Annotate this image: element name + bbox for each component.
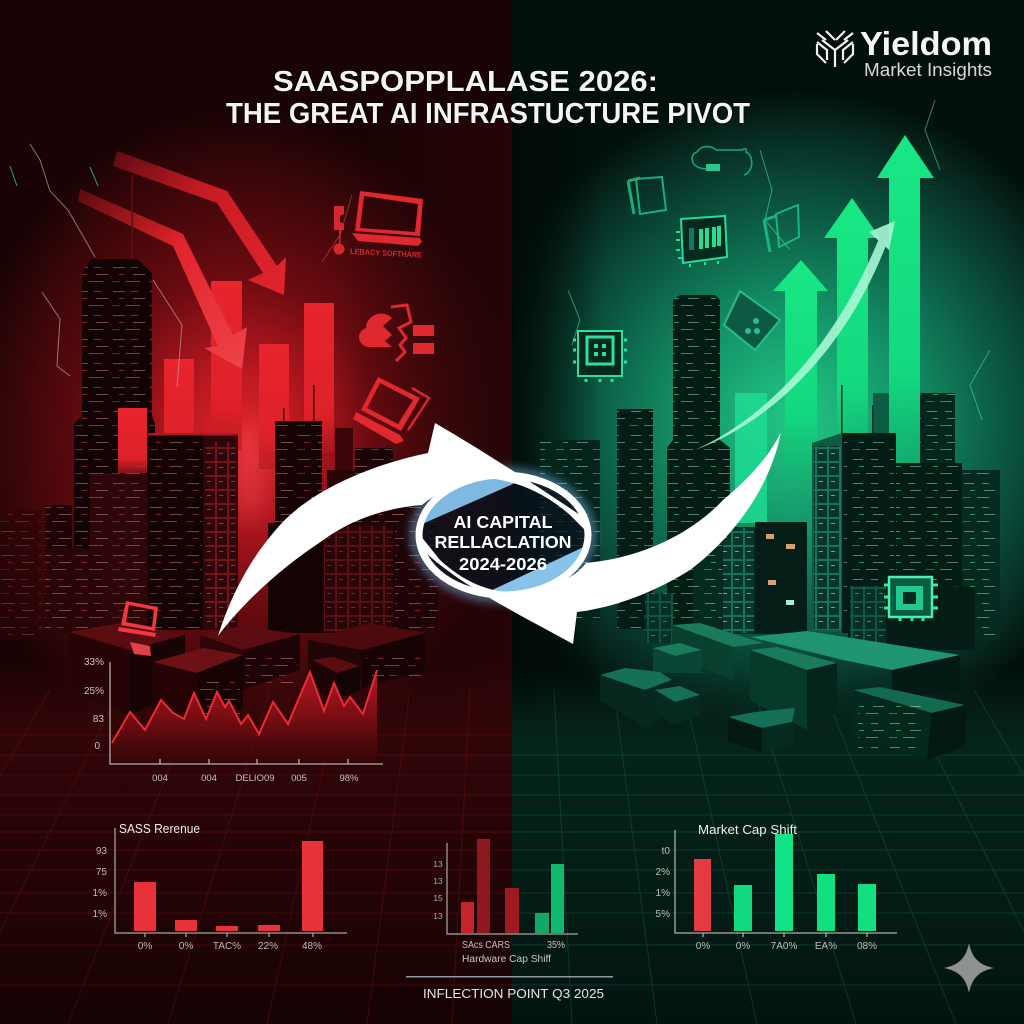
y labels: 1% — [656, 888, 670, 899]
green building: tall tower — [667, 295, 730, 640]
y labels — [433, 859, 443, 921]
icons: AI hardware — [573, 146, 938, 621]
x labels: 48% — [302, 941, 322, 952]
x labels: EA% — [815, 941, 837, 952]
y labels — [656, 846, 670, 920]
bar chart: Hardware Cap Shift — [433, 839, 578, 965]
green rising bars and arrows — [735, 135, 934, 523]
icon: tilted laptop — [353, 377, 429, 444]
green building: mid block — [722, 522, 807, 634]
badge label: AI CAPITAL — [454, 512, 553, 532]
x labels: TAC% — [213, 941, 241, 952]
y labels: 25% — [84, 686, 104, 697]
chip building — [848, 582, 975, 650]
red rubble flag — [130, 642, 151, 656]
icon: broken plug — [334, 206, 344, 254]
stacked small blocks — [653, 643, 702, 656]
badge interior — [422, 479, 584, 592]
area under line — [112, 670, 377, 763]
green building: back towers — [540, 393, 1000, 640]
chart heading: SASS Rerenue — [119, 821, 200, 836]
x labels: 98% — [339, 773, 359, 784]
bars — [461, 839, 564, 933]
badge label: 2024-2026 — [459, 554, 547, 574]
red falling bars — [164, 281, 334, 469]
icon: cloud outline — [692, 146, 752, 175]
y labels — [84, 657, 104, 752]
pale curved growth arrow — [695, 221, 895, 450]
y labels: 13 — [433, 911, 443, 921]
x labels: 0% — [696, 941, 710, 952]
chart caption: Hardware Cap Shiff — [462, 954, 551, 965]
green building: right tall block — [896, 463, 962, 648]
red haze streak between buildings — [236, 420, 264, 520]
x labels: 22% — [258, 941, 278, 952]
green isometric low blocks — [600, 582, 975, 760]
axes — [675, 830, 897, 937]
y labels: 13 — [433, 859, 443, 869]
green arrow: medium — [824, 198, 880, 470]
glow behind loop — [415, 472, 591, 598]
red building: left stepped blocks — [45, 473, 148, 633]
lightning: left — [10, 144, 352, 387]
title: THE GREAT AI INFRASTUCTURE PIVOT — [226, 98, 750, 130]
icon: chip with bars — [676, 216, 727, 267]
bars — [134, 841, 323, 931]
green arrow: tall — [877, 135, 934, 480]
y labels: 5% — [656, 909, 670, 920]
x value: 35% — [547, 940, 565, 951]
green arrow: short — [773, 260, 828, 480]
title: SAASPOPPLALASE 2026: — [273, 66, 658, 98]
x labels: 7A0% — [771, 941, 797, 952]
perspective floor grid: green — [512, 690, 1024, 1024]
icon: cloud chip — [706, 164, 720, 171]
bar chart: Market Cap Shift — [656, 822, 897, 952]
icon: tilted tablet — [724, 291, 780, 350]
central capital reallocation loop — [218, 423, 781, 644]
x labels: 004 — [201, 773, 217, 784]
y labels: 1% — [93, 888, 107, 899]
badge label — [434, 512, 572, 574]
rear long block — [672, 623, 763, 647]
x labels: DELIO09 — [235, 773, 275, 784]
red building: distant left towers — [0, 510, 42, 640]
x labels: 08% — [857, 941, 877, 952]
icons: legacy software — [334, 191, 434, 444]
inflection point callout: INFLECTION POINT Q3 2025 — [423, 986, 604, 1001]
bars — [694, 834, 876, 931]
icon: monitor left — [628, 177, 666, 214]
x labels: SAcs CARS — [462, 940, 510, 951]
badge label: RELLACLATION — [434, 532, 572, 552]
red building: centre block — [268, 523, 395, 633]
white arrow: from legacy up to badge — [218, 423, 590, 636]
axes — [115, 828, 347, 937]
y labels: 93 — [96, 846, 107, 857]
x labels: 0% — [138, 941, 152, 952]
x labels — [152, 773, 359, 784]
lightning: right — [568, 100, 990, 420]
bar chart: SASS Rerenue — [93, 821, 347, 952]
line chart: SaaS decline — [84, 657, 383, 784]
chart heading: Market Cap Shift — [698, 822, 797, 837]
x labels: 0% — [179, 941, 193, 952]
perspective floor grid: red — [0, 690, 512, 1024]
axes — [110, 662, 383, 764]
red skyline — [0, 175, 438, 640]
icon: glowing rooftop chip — [884, 577, 938, 621]
logo tagline: Market Insights — [864, 60, 992, 80]
icon: laptop with caption: LEBACY SOFTHARE — [350, 247, 423, 260]
green skyline — [540, 295, 1000, 648]
logo wordmark: Yieldom — [860, 25, 992, 62]
x labels: 004 — [152, 773, 168, 784]
icon: four-point star — [944, 943, 994, 993]
y labels: 83 — [93, 714, 104, 725]
red downward arrow: upper — [113, 151, 286, 295]
front centre block — [750, 647, 837, 670]
small green bar — [735, 393, 767, 523]
icon: laptop with caption — [350, 191, 423, 260]
red downward arrow: lower — [78, 189, 247, 369]
green building: under-arrow blocks — [645, 540, 723, 643]
y labels: 15 — [433, 893, 443, 903]
red building: back towers — [327, 428, 438, 630]
icon: broken cloud — [359, 305, 434, 361]
x labels — [696, 941, 877, 952]
red bar in front of tower — [118, 408, 147, 476]
trend line — [112, 670, 377, 743]
white arrow: from AI growth down to badge — [416, 432, 781, 644]
x labels: 005 — [291, 773, 307, 784]
bottom right block — [853, 687, 965, 713]
red building: tall tower — [74, 175, 155, 640]
y labels: t0 — [662, 846, 670, 857]
y labels: 1% — [93, 909, 107, 920]
icon: monitor right — [764, 205, 799, 252]
red building: mid tower — [275, 385, 322, 611]
x labels: 0% — [736, 941, 750, 952]
central platform — [750, 631, 960, 670]
white ring of badge — [419, 475, 588, 595]
cube pair — [728, 708, 795, 728]
title — [226, 66, 750, 130]
green building: second tower — [617, 409, 653, 629]
logo mark — [817, 31, 853, 67]
y labels: 33% — [84, 657, 104, 668]
axes — [447, 843, 578, 934]
y labels: 75 — [96, 867, 107, 878]
x labels — [138, 941, 322, 952]
y labels: 2% — [656, 867, 670, 878]
y labels: 13 — [433, 876, 443, 886]
red isometric low blocks — [68, 601, 425, 725]
logo: Yieldom Market Insights — [817, 25, 992, 80]
y labels — [93, 846, 107, 920]
red building: large grid block — [148, 433, 238, 630]
icon: square chip — [573, 331, 627, 382]
y labels: 0 — [94, 741, 100, 752]
small red laptop icon — [118, 601, 158, 637]
green building: large grid block — [812, 385, 896, 633]
